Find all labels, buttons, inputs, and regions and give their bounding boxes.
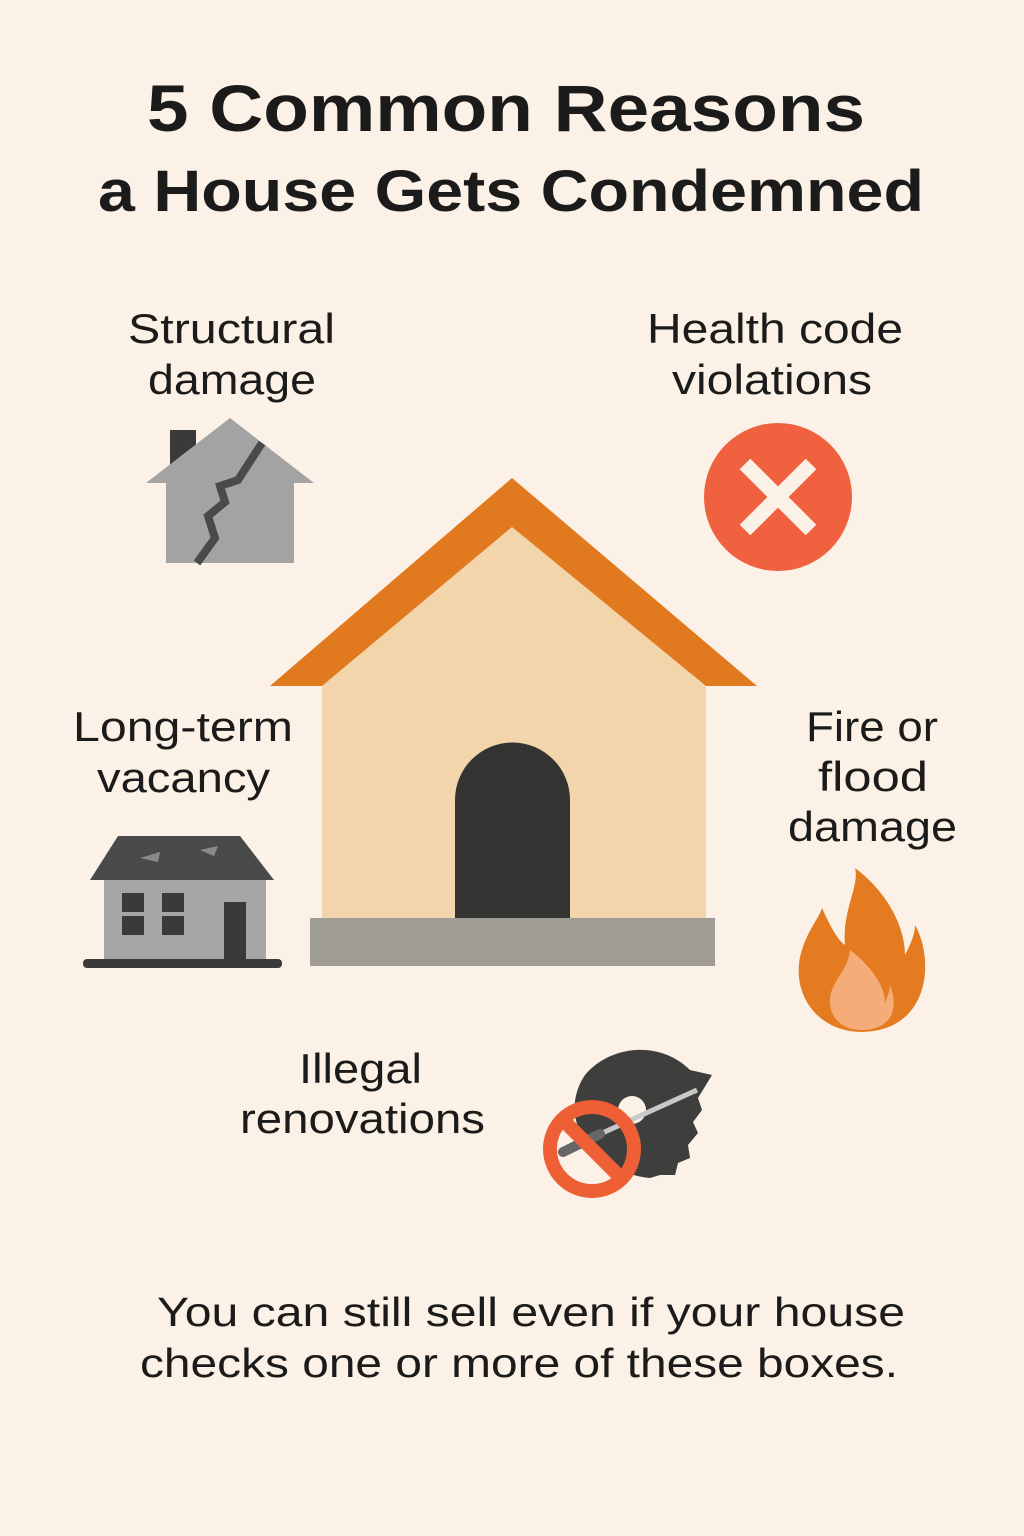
label: structural damage: Structural	[128, 305, 335, 352]
icon: cracked house	[146, 418, 314, 563]
title: a House Gets Condemned	[98, 159, 924, 224]
label: fire or flood damage: damage	[788, 803, 957, 850]
label: illegal renovations: Illegal	[299, 1045, 422, 1092]
footer text: You can still sell even if your house	[157, 1289, 905, 1335]
footer text	[140, 1289, 905, 1386]
main house	[270, 478, 757, 966]
icon: vacant house	[83, 836, 282, 968]
label: long-term vacancy: vacancy	[97, 754, 270, 801]
icon: red x circle	[704, 423, 852, 571]
icon: saw with no sign	[550, 1050, 712, 1191]
label: long-term vacancy: Long-term	[73, 703, 293, 750]
title	[98, 71, 924, 224]
title: 5 Common Reasons	[147, 71, 865, 145]
label: fire or flood damage: Fire or	[806, 703, 938, 750]
label: health code violations	[647, 305, 903, 403]
label: structural damage: damage	[148, 356, 316, 403]
label: fire or flood damage	[788, 703, 957, 850]
label: health code violations: violations	[672, 356, 872, 403]
label: long-term vacancy	[73, 703, 293, 801]
label: illegal renovations: renovations	[240, 1095, 485, 1142]
icon: flame	[799, 868, 925, 1032]
label: illegal renovations	[240, 1045, 485, 1142]
label: fire or flood damage: flood	[818, 753, 928, 800]
label: health code violations: Health code	[647, 305, 903, 352]
label: structural damage	[128, 305, 335, 403]
footer text: checks one or more of these boxes.	[140, 1340, 898, 1386]
